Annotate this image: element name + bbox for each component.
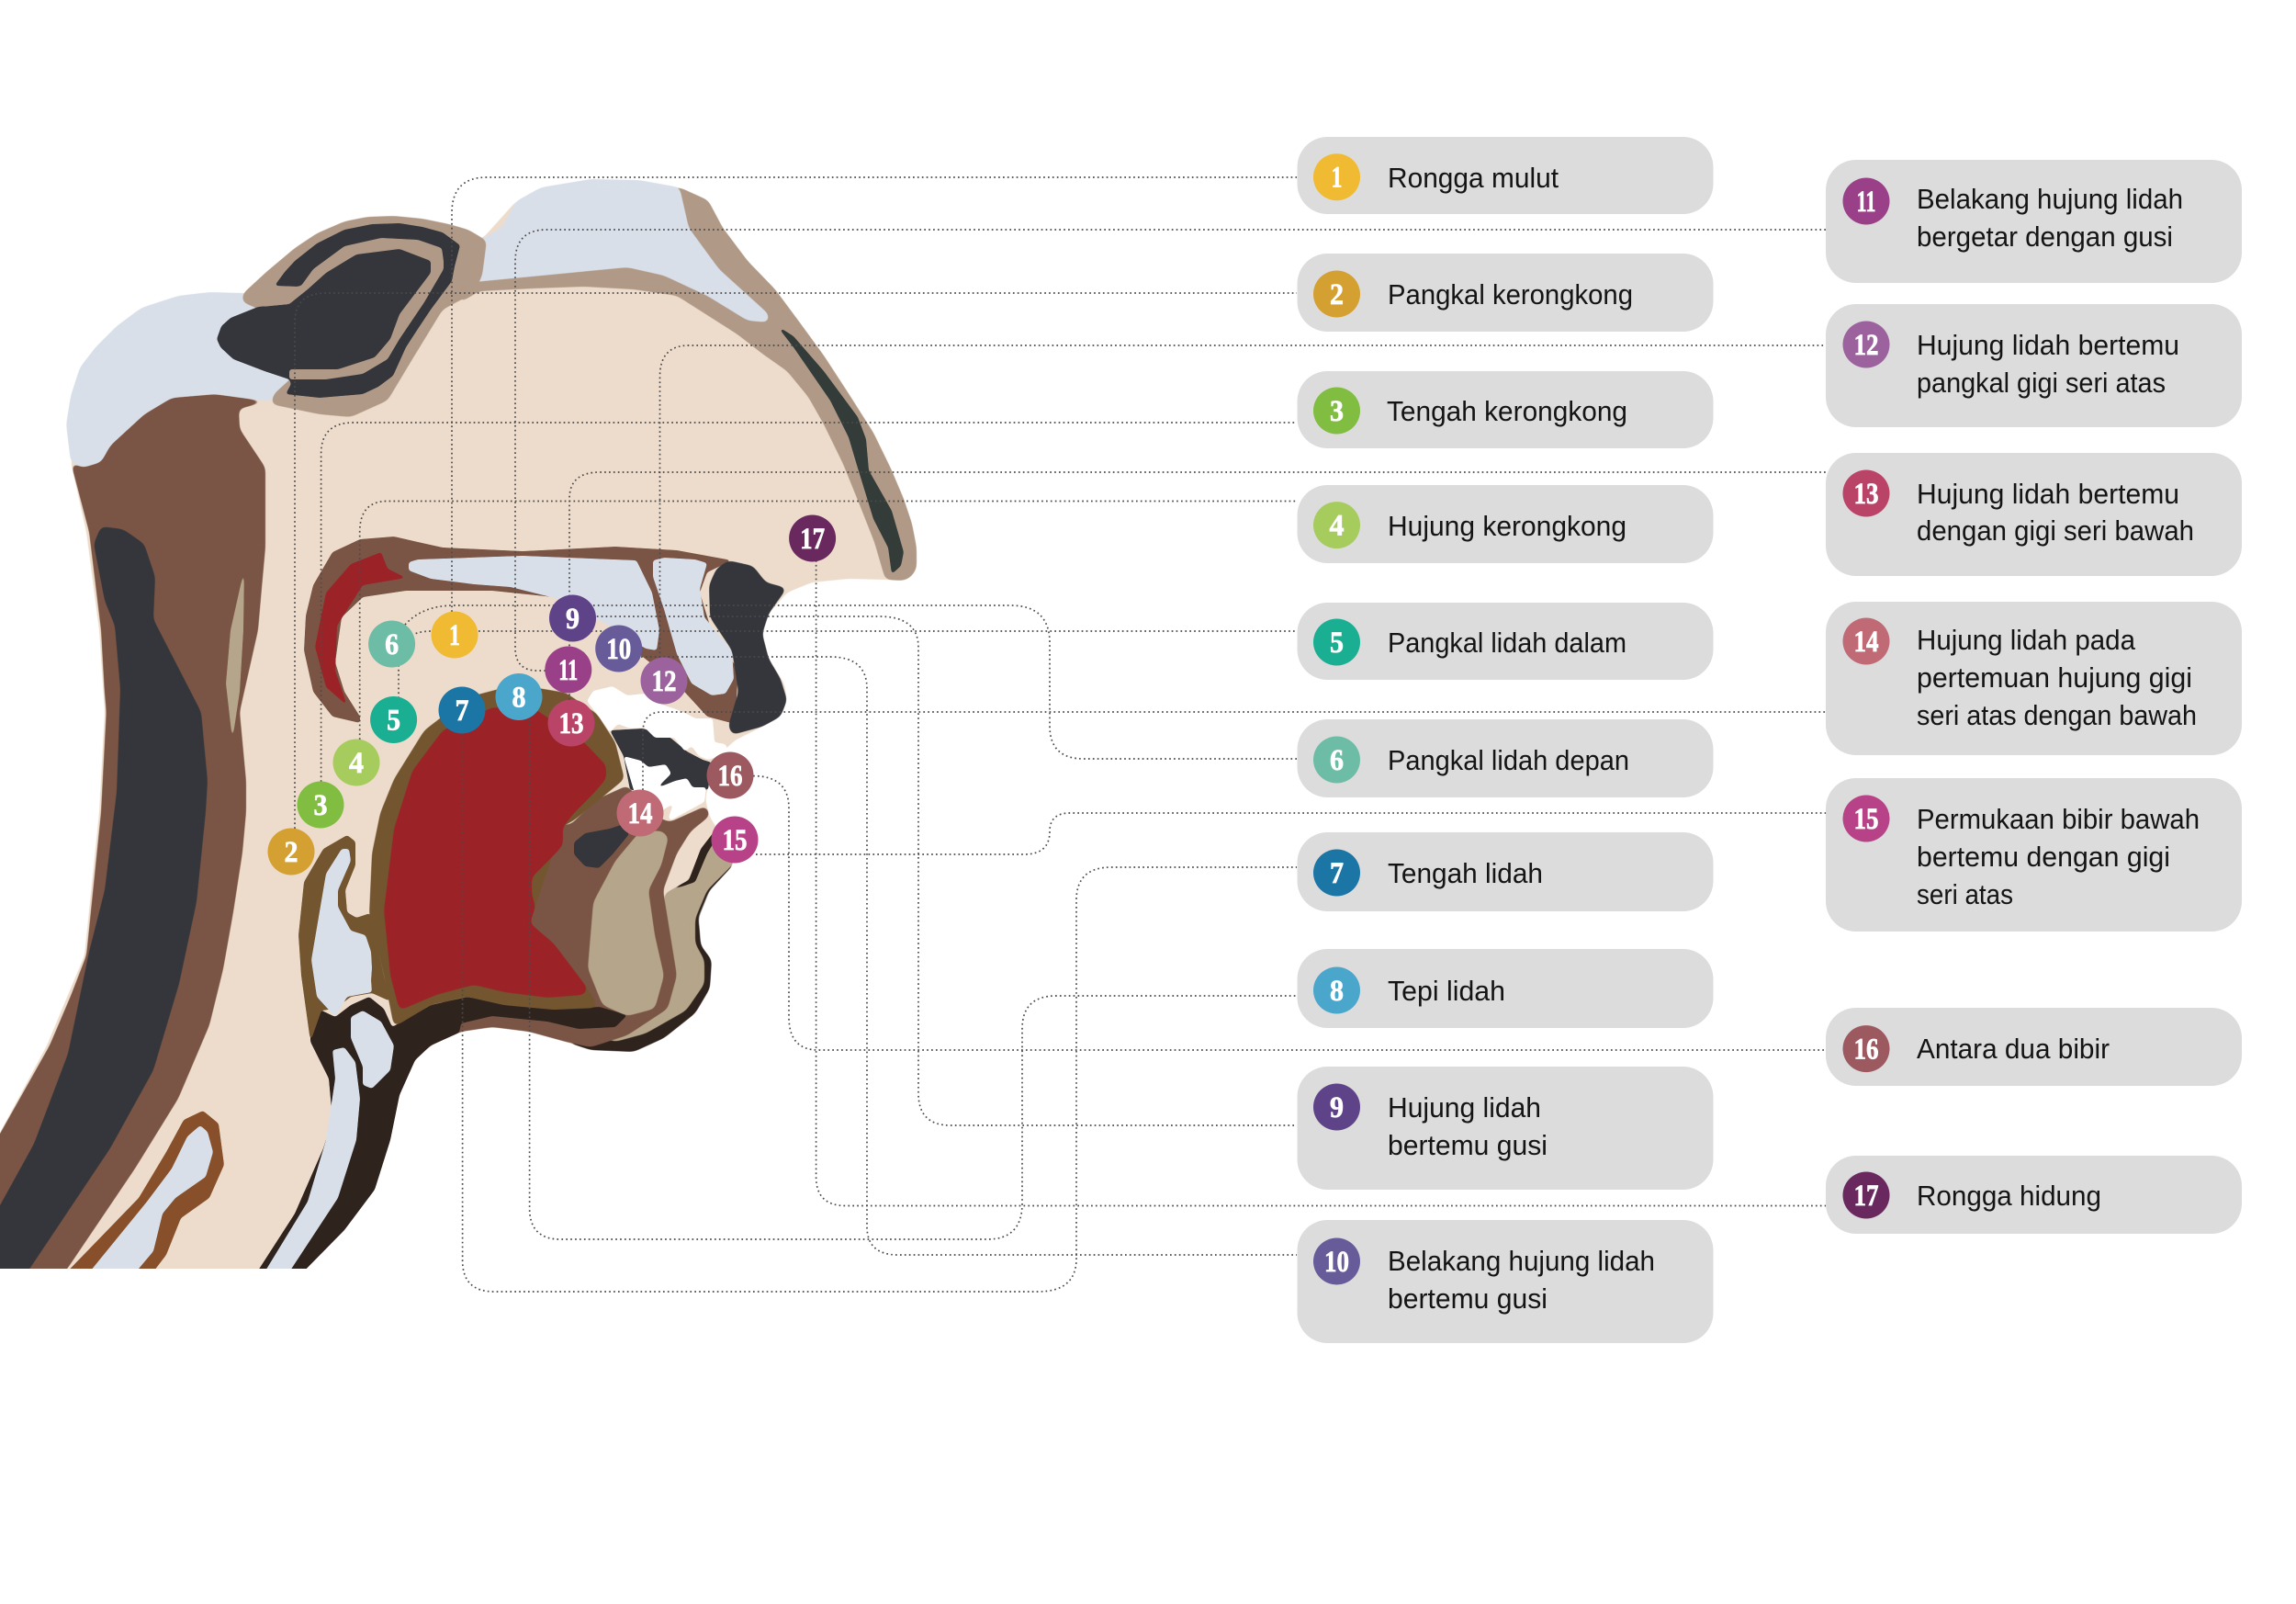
lower teeth bbox=[624, 756, 706, 820]
legend item 10: Belakang hujung lidah bbox=[1388, 1245, 1655, 1277]
upper teeth bbox=[587, 686, 729, 760]
legend item 9: bertemu gusi bbox=[1388, 1129, 1548, 1161]
connector: 6 bbox=[405, 605, 1297, 759]
marker 1: 1 bbox=[449, 619, 460, 652]
connector: 16 bbox=[753, 776, 1826, 1050]
dark mouth interior bbox=[610, 729, 712, 790]
tan sliver in the neck bbox=[226, 569, 244, 740]
marker 2: 2 bbox=[285, 836, 298, 869]
tan under-tongue bbox=[588, 830, 669, 1016]
black chin outline bbox=[566, 854, 735, 1052]
light blue palate bone right bbox=[653, 558, 734, 695]
marker 11 bbox=[545, 647, 591, 693]
legend item 10 bbox=[1297, 1220, 1714, 1343]
olive tongue outline bbox=[369, 684, 625, 1027]
dark upper lip bbox=[709, 560, 787, 735]
legend item 17 bbox=[1826, 1156, 2242, 1234]
connector: 15 bbox=[756, 813, 1826, 854]
marker 10 bbox=[595, 625, 642, 672]
legend item 13: Hujung lidah bertemu bbox=[1917, 478, 2179, 510]
connector: 4 bbox=[360, 502, 1297, 740]
legend item 2 bbox=[1297, 254, 1714, 332]
legend item 13: dengan gigi seri bawah bbox=[1917, 514, 2194, 547]
marker 13: 13 bbox=[558, 707, 584, 740]
legend item 16: 16 bbox=[1853, 1034, 1879, 1067]
light blue trachea bbox=[266, 1047, 360, 1269]
legend item 14 bbox=[1826, 602, 2242, 755]
light blue skull cap bbox=[66, 292, 294, 468]
legend item 3: Tengah kerongkong bbox=[1387, 395, 1627, 427]
marker 7 bbox=[439, 687, 485, 733]
legend item 3: 3 bbox=[1330, 395, 1344, 428]
legend item 9: 9 bbox=[1330, 1091, 1344, 1124]
legend item 12 bbox=[1826, 304, 2242, 427]
marker 4 bbox=[332, 739, 380, 786]
legend item 8: 8 bbox=[1330, 975, 1344, 1008]
legend item 9: Hujung lidah bbox=[1388, 1091, 1541, 1124]
dark sinus cavity bbox=[217, 223, 460, 398]
marker 2 bbox=[268, 829, 314, 875]
legend item 11: bergetar dengan gusi bbox=[1917, 220, 2173, 253]
legend item 13: 13 bbox=[1853, 478, 1879, 511]
marker 15: 15 bbox=[722, 824, 748, 857]
legend item 16 bbox=[1826, 1008, 2242, 1086]
brown jaw and gum bbox=[415, 785, 710, 1060]
dotted connector lines bbox=[295, 177, 1826, 1292]
marker 16: 16 bbox=[718, 760, 742, 793]
connector: 13 bbox=[569, 472, 1826, 700]
legend item 6: 6 bbox=[1330, 744, 1344, 777]
light blue larynx cartilage bbox=[92, 1126, 213, 1269]
black jaw band and throat bbox=[248, 997, 627, 1286]
marker 14 bbox=[617, 790, 663, 836]
soft palate brown outline bbox=[304, 537, 738, 724]
legend item 16: Antara dua bibir bbox=[1917, 1033, 2110, 1065]
dark nasal strip bbox=[781, 328, 904, 574]
marker 12: 12 bbox=[652, 665, 676, 698]
connector: 5 bbox=[399, 631, 1297, 698]
legend item 15: seri atas bbox=[1917, 878, 2013, 910]
marker 7: 7 bbox=[456, 695, 468, 728]
orange-brown larynx outline bbox=[70, 1112, 224, 1269]
legend item 17: Rongga hidung bbox=[1917, 1180, 2101, 1212]
legend item 7 bbox=[1297, 832, 1714, 911]
thin dark lip line bbox=[676, 834, 713, 887]
legend item 10: 10 bbox=[1324, 1246, 1349, 1279]
connector: 12 bbox=[659, 345, 1826, 658]
connector: 2 bbox=[295, 293, 1297, 829]
marker 1 bbox=[432, 612, 478, 658]
legend item 14: 14 bbox=[1853, 626, 1879, 659]
marker 16 bbox=[707, 751, 753, 799]
legend item 9 bbox=[1297, 1067, 1714, 1190]
connector: 8 bbox=[530, 719, 1297, 1239]
connector: 14 bbox=[643, 712, 1826, 790]
marker 12 bbox=[641, 658, 687, 704]
legend item 12: Hujung lidah bertemu bbox=[1917, 329, 2179, 361]
legend item 1: 1 bbox=[1332, 162, 1343, 195]
red tongue bbox=[384, 707, 606, 1011]
marker 15 bbox=[711, 816, 759, 864]
light blue epiglottis cartilage bbox=[311, 849, 372, 1017]
legend item 14: Hujung lidah pada bbox=[1917, 624, 2136, 656]
legend item 6 bbox=[1297, 719, 1714, 797]
marker 11: 11 bbox=[558, 654, 578, 687]
legend item 12: 12 bbox=[1853, 329, 1879, 362]
legend item 11 bbox=[1826, 160, 2242, 283]
legend item 2: Pangkal kerongkong bbox=[1388, 278, 1633, 311]
legend item 4: 4 bbox=[1330, 510, 1345, 543]
taupe sinus arch bbox=[242, 216, 487, 417]
legend item 15 bbox=[1826, 778, 2242, 932]
marker 3: 3 bbox=[314, 789, 327, 822]
legend item 4: Hujung kerongkong bbox=[1388, 510, 1626, 542]
legend item 12: pangkal gigi seri atas bbox=[1917, 367, 2166, 399]
soft palate red muscle bbox=[315, 552, 406, 706]
legend item 5: Pangkal lidah dalam bbox=[1388, 627, 1626, 659]
legend item 11: 11 bbox=[1857, 186, 1875, 219]
numbered markers on the anatomy bbox=[268, 514, 836, 875]
legend item 15: bertemu dengan gigi bbox=[1917, 841, 2170, 873]
dark sublingual blob bbox=[574, 824, 629, 868]
connector: 10 bbox=[641, 657, 1297, 1255]
marker 17: 17 bbox=[800, 523, 825, 556]
legend item 15: 15 bbox=[1853, 803, 1879, 836]
tan lower lip band bbox=[611, 845, 733, 1042]
anatomy: head cross-section bbox=[0, 179, 917, 1286]
connector: 9 bbox=[588, 616, 1297, 1125]
light blue palate bone left bbox=[409, 556, 659, 650]
legend item 7: 7 bbox=[1330, 857, 1344, 890]
marker 8: 8 bbox=[512, 682, 525, 715]
marker 6: 6 bbox=[385, 628, 399, 661]
legend item 6: Pangkal lidah depan bbox=[1388, 744, 1629, 776]
marker 6 bbox=[368, 621, 415, 667]
legend item 13 bbox=[1826, 453, 2242, 576]
legend item 1: Rongga mulut bbox=[1388, 162, 1559, 194]
connector: 7 bbox=[463, 733, 1297, 1292]
light blue frontal sinus bbox=[461, 179, 769, 322]
taupe nose bone bbox=[459, 187, 917, 581]
connector: 11 bbox=[515, 230, 1826, 671]
marker 9 bbox=[549, 595, 596, 641]
connector: 3 bbox=[321, 423, 1297, 782]
legend item 1 bbox=[1297, 137, 1714, 214]
light blue hyoid blob bbox=[351, 1011, 394, 1089]
brown back of head and neck bbox=[0, 394, 269, 1286]
marker 10: 10 bbox=[606, 633, 631, 666]
legend item 14: pertemuan hujung gigi bbox=[1917, 661, 2192, 694]
marker 3 bbox=[298, 781, 343, 829]
legend item 10: bertemu gusi bbox=[1388, 1282, 1548, 1315]
olive epiglottis bbox=[298, 835, 390, 1042]
marker 4: 4 bbox=[349, 747, 364, 780]
connector: 1 bbox=[452, 177, 1297, 612]
marker 8 bbox=[496, 673, 542, 720]
legend item 2: 2 bbox=[1330, 278, 1344, 311]
legend: right column bbox=[1826, 160, 2242, 1234]
legend item 17: 17 bbox=[1853, 1180, 1879, 1213]
marker 14: 14 bbox=[628, 797, 652, 830]
legend item 5: 5 bbox=[1330, 627, 1344, 660]
dark spine column bbox=[0, 526, 208, 1286]
marker 13 bbox=[547, 700, 595, 746]
marker 5 bbox=[370, 696, 417, 743]
taupe sinus inner band bbox=[262, 238, 444, 379]
legend item 11: Belakang hujung lidah bbox=[1917, 183, 2183, 215]
legend item 7: Tengah lidah bbox=[1388, 857, 1543, 889]
legend item 8 bbox=[1297, 949, 1714, 1028]
legend item 15: Permukaan bibir bawah bbox=[1917, 803, 2200, 835]
legend item 4 bbox=[1297, 485, 1714, 563]
marker 17 bbox=[789, 514, 836, 562]
legend item 14: seri atas dengan bawah bbox=[1917, 699, 2197, 731]
legend item 8: Tepi lidah bbox=[1388, 975, 1505, 1007]
legend item 5 bbox=[1297, 603, 1714, 680]
marker 5: 5 bbox=[387, 704, 400, 737]
legend item 3 bbox=[1297, 371, 1714, 448]
connector: 17 bbox=[816, 560, 1826, 1205]
legend: left column bbox=[1297, 137, 1714, 1343]
marker 9: 9 bbox=[566, 603, 580, 636]
head skin silhouette bbox=[0, 179, 917, 1286]
